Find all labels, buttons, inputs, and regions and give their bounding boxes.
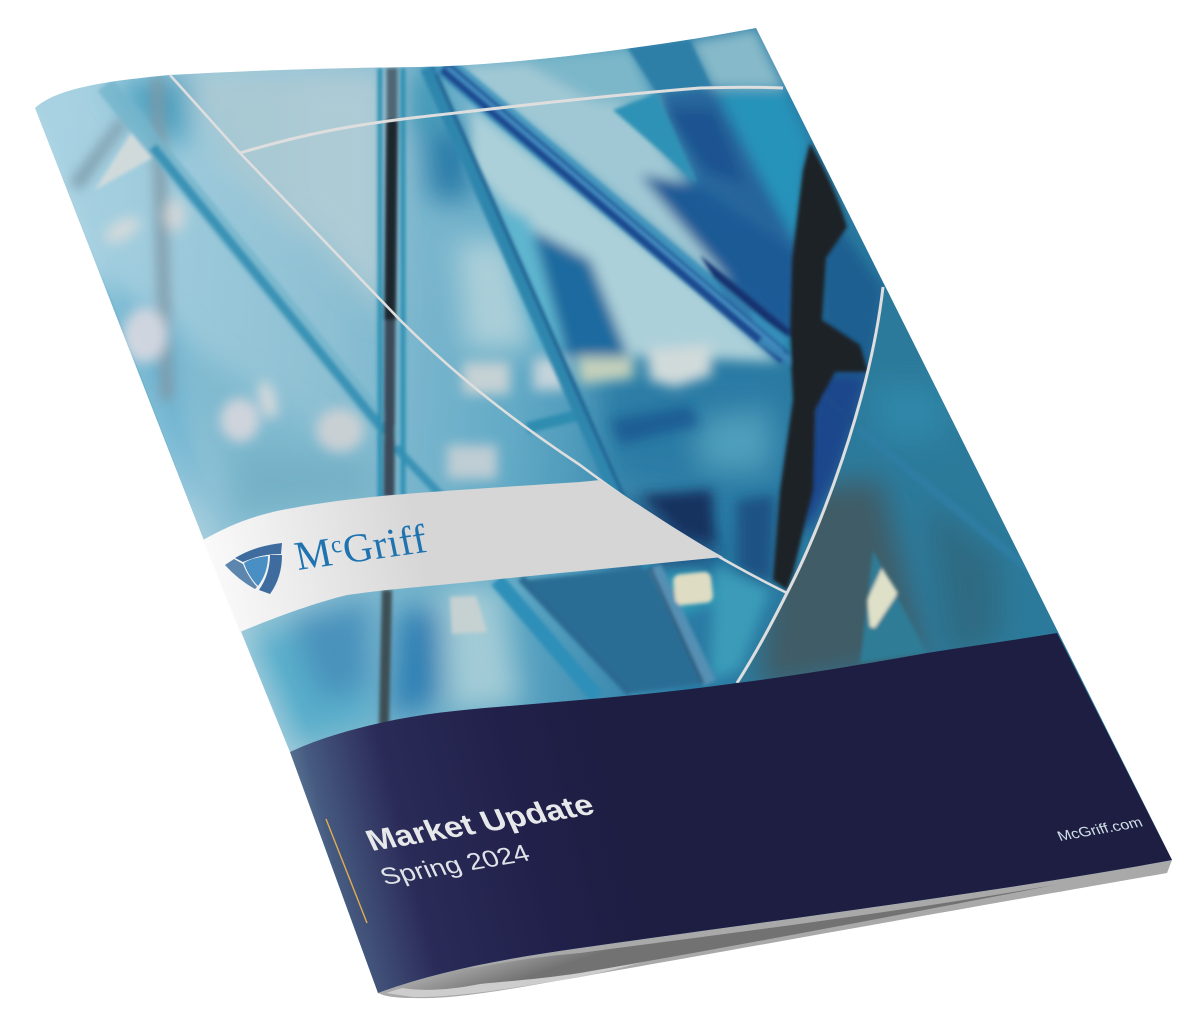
title: Market Update: Market Update [360,788,600,857]
gold accent rule [326,819,367,923]
page block edge [378,860,1172,998]
white curved rules [170,75,883,683]
McGriff wordmark: M [291,529,336,579]
McGriff wordmark: Griff [338,515,431,572]
navy title panel [290,633,1172,993]
McGriff shield logo [225,543,282,594]
right panel beyond the arc [740,284,1060,682]
McGriff wordmark: c [328,532,345,559]
pale glass and wedges [470,105,780,362]
subtitle: Spring 2024: Spring 2024 [376,840,534,890]
crisp darker glass shapes [95,133,152,190]
logo: top segment [235,543,282,562]
website: McGriff.com [1055,815,1145,845]
logo: left segment [225,559,257,589]
spine highlight [112,301,303,752]
white logo band [203,480,723,632]
logo: right segment [259,555,282,594]
logo: centre segment [244,556,268,586]
